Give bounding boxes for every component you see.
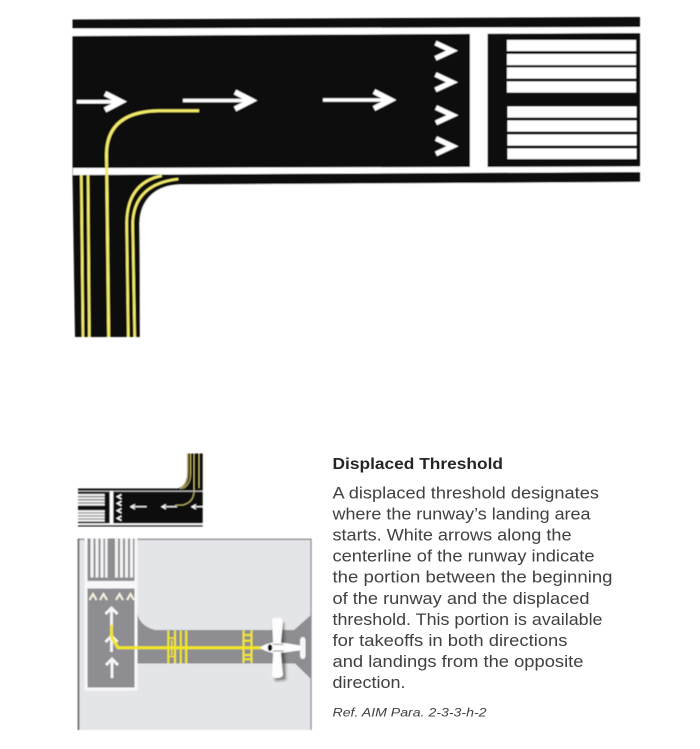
white runway arrows xyxy=(106,608,118,678)
body text block: for takeoffs in both directions xyxy=(332,632,568,650)
body text block: direction. xyxy=(332,674,406,692)
runway side stripe: bottom xyxy=(73,166,640,175)
yellow ladder marking xyxy=(243,630,252,663)
threshold stripes xyxy=(78,494,105,522)
lower runway section xyxy=(88,588,134,688)
reference note: Ref. AIM Para. 2-3-3-h-2 xyxy=(332,706,487,720)
body text block: starts. White arrows along the xyxy=(332,526,572,544)
yellow hold markings near runway xyxy=(168,630,186,664)
body text block: A displaced threshold designates xyxy=(332,484,599,502)
frame line: left xyxy=(78,539,80,730)
runway pavement xyxy=(72,17,640,337)
body text block: the portion between the beginning xyxy=(332,569,612,587)
white area beside taxiway xyxy=(140,182,642,338)
threshold bar xyxy=(110,491,113,524)
taxiway pavement xyxy=(138,614,311,679)
body text block: and landings from the opposite xyxy=(332,653,584,671)
small runway pavement xyxy=(78,454,203,526)
threshold stripes xyxy=(507,40,636,159)
icon: airplane xyxy=(260,618,306,681)
ground background xyxy=(78,540,311,730)
body text block: centerline of the runway indicate xyxy=(332,548,594,566)
side stripes xyxy=(78,491,203,492)
diagram: airport surface illustration with airplane xyxy=(78,538,311,730)
runway white surround xyxy=(84,538,138,691)
yellow taxiway edge lines xyxy=(81,175,178,337)
diagram: large runway with displaced threshold xyxy=(72,17,642,338)
yellow taxiway centerline xyxy=(112,625,262,648)
threshold chevrons xyxy=(436,43,452,154)
white centerline arrows xyxy=(77,92,390,110)
heading: Displaced Threshold xyxy=(332,456,503,473)
threshold bar xyxy=(470,30,488,170)
body text block: threshold. This portion is available xyxy=(332,611,602,629)
yellow taxiway lines xyxy=(175,454,199,505)
body text block xyxy=(331,484,612,692)
frame line: top and right xyxy=(78,539,311,730)
body text block: where the runway’s landing area xyxy=(331,505,591,523)
threshold chevrons xyxy=(118,494,122,520)
yellow taxiway centerline xyxy=(106,111,199,337)
runway side stripe: top xyxy=(72,27,640,36)
diagram: small runway overview xyxy=(78,454,203,526)
body text block: of the runway and the displaced xyxy=(332,590,590,608)
upper runway section with stripes xyxy=(88,538,134,581)
threshold chevrons xyxy=(90,594,134,600)
white arrows xyxy=(131,504,203,509)
